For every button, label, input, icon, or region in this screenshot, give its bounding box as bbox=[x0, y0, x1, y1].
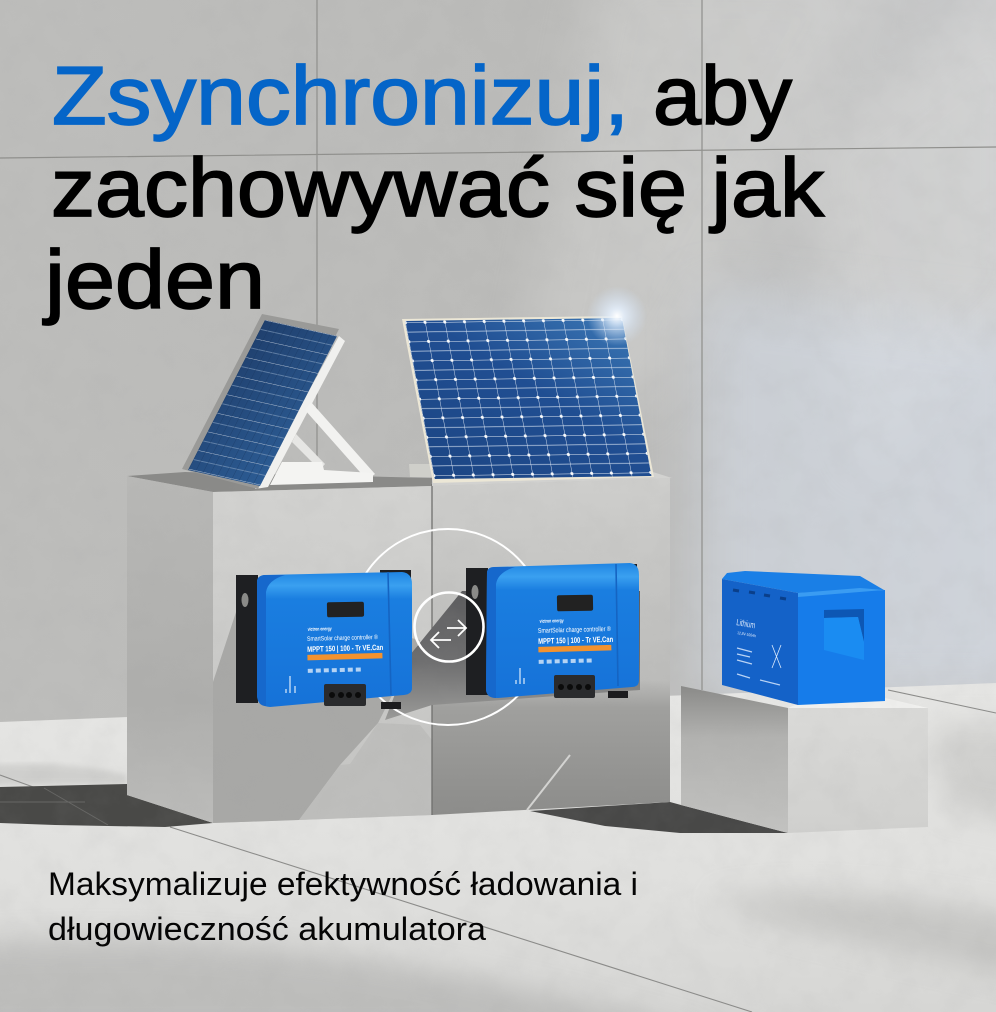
block: left concrete pedestal bbox=[127, 472, 432, 823]
product label: SmartSolar charge controller ® bbox=[307, 633, 378, 643]
concrete wall background bbox=[0, 0, 996, 730]
title bbox=[42, 49, 825, 326]
subtitle: Maksymalizuje efektywność ładowania i bbox=[48, 866, 638, 902]
product label bbox=[307, 625, 384, 671]
product label: MPPT 150 | 100 - Tr VE.Can bbox=[538, 635, 613, 646]
battery: lithium: 12,8V-100Ah bbox=[737, 630, 756, 638]
handle recess bbox=[824, 609, 864, 642]
vent slots bbox=[733, 590, 786, 599]
floor bbox=[0, 683, 996, 1012]
display window bbox=[327, 602, 364, 617]
block: small concrete pedestal bbox=[681, 686, 928, 833]
title: jeden bbox=[42, 233, 265, 326]
title: aby bbox=[653, 49, 793, 142]
terminal block bbox=[324, 684, 366, 706]
certification icons bbox=[539, 660, 595, 662]
lit patch on block bbox=[299, 723, 432, 820]
diagonal shadow behind connection bbox=[385, 591, 640, 720]
certification icons bbox=[308, 669, 362, 671]
product label: SmartSolar charge controller ® bbox=[538, 625, 611, 635]
large sync circle bbox=[350, 529, 546, 725]
controller: right, SmartSolar bbox=[466, 563, 639, 698]
title: zachowywać się jak bbox=[51, 141, 825, 234]
battery: lithium bbox=[722, 571, 885, 705]
solar panel: left, with stand bbox=[182, 314, 375, 489]
battery: lithium: Lithium bbox=[736, 617, 756, 630]
product label bbox=[538, 617, 614, 662]
diagonal shadow on block bbox=[213, 600, 420, 823]
display window bbox=[557, 595, 593, 611]
solar panel: right bbox=[402, 316, 654, 483]
product label: MPPT 150 | 100 - Tr VE.Can bbox=[307, 643, 383, 654]
controller: left, SmartSolar bbox=[236, 570, 412, 709]
block: right concrete pedestal bbox=[432, 468, 672, 815]
sync arrows badge bbox=[414, 592, 484, 662]
status LEDs bbox=[516, 668, 524, 684]
mounting bracket bbox=[466, 564, 637, 695]
mounting bracket bbox=[236, 570, 411, 703]
product label: victron energy bbox=[308, 626, 332, 633]
arrow left bbox=[431, 632, 451, 648]
title: Zsynchronizuj, bbox=[52, 49, 629, 142]
subtitle: długowieczność akumulatora bbox=[48, 911, 486, 947]
terminal block bbox=[554, 675, 595, 698]
status LEDs bbox=[286, 676, 295, 693]
arrow right bbox=[447, 620, 466, 636]
subtitle bbox=[48, 866, 638, 947]
product label: victron energy bbox=[540, 618, 564, 625]
sun flare bbox=[587, 286, 647, 346]
panel stand bbox=[255, 336, 345, 489]
